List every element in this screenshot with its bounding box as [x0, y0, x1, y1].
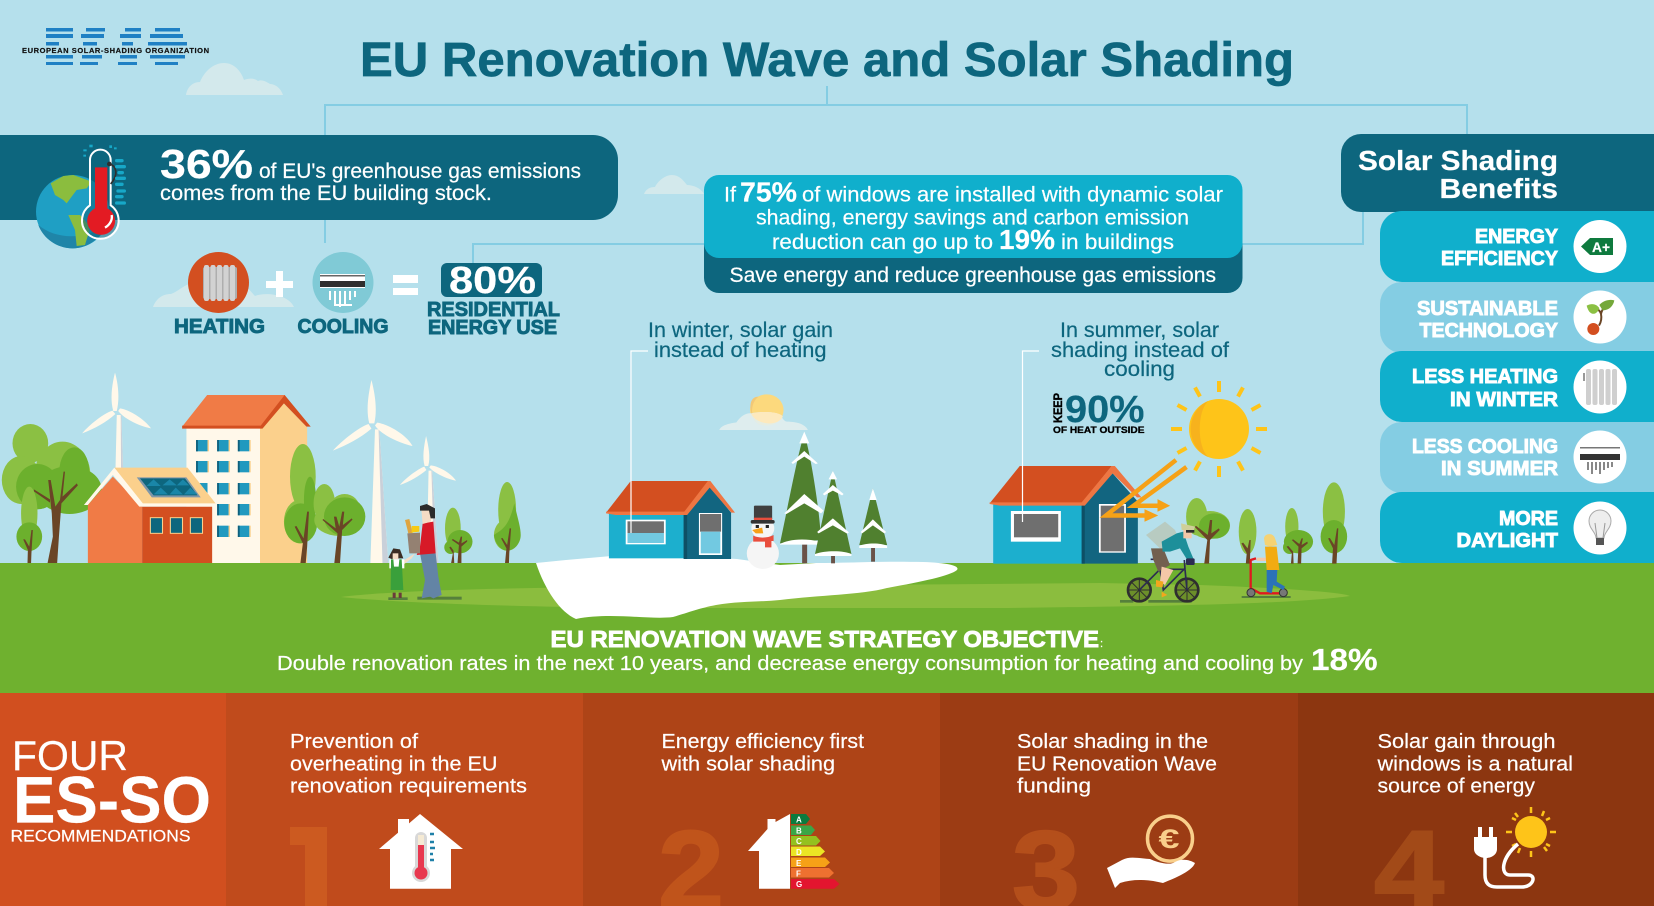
captions: summer [1051, 319, 1229, 381]
icon: cyclist [1146, 522, 1195, 597]
people: man and girl [388, 504, 462, 600]
panel: four ES-SO recommendations: RECOMMENDATIONS [10, 826, 190, 846]
snow patch [536, 555, 958, 619]
benefit: energy efficiency: EFFICIENCY [1441, 248, 1559, 270]
benefit: sustainable technology: TECHNOLOGY [1420, 320, 1559, 342]
benefit: sustainable technology [1380, 282, 1654, 353]
benefit: energy efficiency: A+ [1592, 239, 1610, 255]
text: emissions line two: comes from the EU building stock. [160, 182, 492, 205]
icon: winter sun and cloud [719, 394, 808, 430]
heading box: Solar Shading [1358, 145, 1558, 176]
benefit: energy efficiency [1380, 211, 1654, 282]
label: residential energy use: RESIDENTIAL [427, 299, 560, 321]
cloud: center [644, 175, 704, 194]
icon: house with solar panels [84, 468, 216, 563]
captions: summer: cooling [1104, 358, 1175, 381]
callout: 75% windows: 19% [999, 224, 1055, 255]
callout: 75% windows: shading, energy savings and carbon emission [756, 206, 1189, 230]
panel: recommendation 1 [226, 693, 583, 906]
icon: house with energy label: G [796, 880, 802, 889]
captions: summer: In summer, solar [1060, 319, 1219, 342]
icon: pine trees [780, 432, 887, 563]
icon: trees by the tower [284, 444, 365, 563]
icon: right side trees [1186, 482, 1347, 564]
icon: house with energy label [748, 814, 840, 889]
stat: keep 90% of heat outside: OF HEAT OUTSIDE [1053, 425, 1144, 435]
benefit: more daylight: DAYLIGHT [1456, 530, 1558, 552]
benefit: energy efficiency: ENERGY [1475, 226, 1559, 248]
objective text: 18% [1311, 642, 1378, 677]
benefit: sustainable technology: SUSTAINABLE [1417, 298, 1558, 320]
label: residential energy use [427, 299, 560, 339]
panel: recommendation 2 [583, 693, 940, 906]
icon: globe and thermometer [36, 145, 126, 248]
icon: big left tree [2, 424, 102, 563]
captions: winter: instead of heating [654, 339, 826, 362]
benefit: less cooling in summer: LESS COOLING [1412, 436, 1558, 458]
scene: wind turbines, trees, houses on the left [2, 373, 521, 563]
icon: child [1257, 534, 1285, 593]
benefit: less heating in winter: LESS HEATING [1412, 366, 1558, 388]
icon: plug and sun [1474, 807, 1556, 887]
icon: hand holding euro coin: € [1158, 824, 1180, 854]
scene: winter house [606, 394, 887, 569]
label: residential energy use: ENERGY USE [428, 317, 557, 339]
callout: 75% windows: reduction can go up to [772, 231, 993, 254]
icon: plus [266, 271, 293, 297]
ground path highlight [341, 583, 1350, 608]
callout: 75% windows: Save energy and reduce greenhouse gas emissions [730, 264, 1216, 287]
text: emissions line one: of EU's greenhouse gas emissions [259, 160, 581, 183]
icon: turbine one [82, 373, 151, 475]
icon: house with energy label: C [796, 837, 802, 846]
lead line: winter [631, 351, 648, 533]
callout: 75% windows: of windows are installed with dynamic solar [802, 184, 1223, 206]
logo: ES-SO: EUROPEAN SOLAR-SHADING ORGANIZATION [22, 46, 209, 55]
icon: snowman [747, 506, 779, 569]
benefit: less cooling in summer: IN SUMMER [1441, 458, 1559, 480]
equation: heating plus cooling equals 80% [153, 252, 560, 339]
objective text [277, 626, 1378, 677]
benefit: more daylight: MORE [1499, 508, 1558, 530]
panel: recommendation 4 [1298, 693, 1654, 906]
panel: four ES-SO recommendations [0, 693, 226, 906]
panel: recommendation 4: source of energy [1378, 774, 1536, 798]
scene: summer house, sun, people [990, 466, 1347, 564]
objective text: Double renovation rates in the next 10 years, and decrease energy consumption for heating and cooling by [277, 652, 1304, 675]
stat: keep 90% of heat outside: 90% [1065, 389, 1144, 431]
icon: house with energy label: E [796, 859, 802, 868]
connector lines [325, 86, 1467, 263]
captions: winter [648, 319, 833, 362]
heading box: Benefits [1440, 173, 1558, 204]
callout: 75% windows: in buildings [1061, 231, 1174, 254]
objective text: EU RENOVATION WAVE STRATEGY OBJECTIVE [550, 626, 1099, 652]
panel: recommendation 4: Solar gain through [1378, 730, 1556, 753]
cloud: top left [186, 63, 283, 95]
benefit: less cooling in summer [1380, 422, 1654, 493]
heading box [1341, 134, 1654, 212]
panel: recommendation 1: renovation requirements [290, 774, 527, 798]
icon: scooter [1247, 558, 1287, 597]
icon: house with energy label: B [796, 826, 802, 836]
captions: winter: In winter, solar gain [648, 319, 833, 342]
cloud behind icons [153, 284, 294, 307]
icon: summer house [990, 466, 1141, 564]
objective text: : [1100, 638, 1103, 650]
benefit: less heating in winter [1380, 351, 1654, 422]
icon: house with thermometer [379, 814, 463, 889]
icon: house with energy label: F [796, 870, 801, 878]
icon: bicycle [1128, 559, 1198, 601]
captions: summer: shading instead of [1051, 339, 1229, 362]
icon: turbine three [400, 436, 456, 563]
lead line: summer [1022, 351, 1039, 522]
stat: keep 90% of heat outside: KEEP [1051, 393, 1065, 423]
panel: four ES-SO recommendations: FOUR [12, 732, 128, 779]
benefit: more daylight [1380, 492, 1654, 563]
panel: recommendation 2: Energy efficiency first [662, 730, 864, 753]
icon: house with energy label: A [796, 816, 802, 824]
callout: 75% windows: 75% [740, 176, 797, 208]
ground [0, 563, 1654, 693]
icon: turbine two [333, 380, 412, 563]
icon: trees beyond the turbines [444, 482, 521, 563]
icon: summer sun [1171, 381, 1267, 477]
icon: heating radiator [188, 252, 249, 313]
title: EU Renovation Wave and Solar Shading [360, 34, 1294, 87]
panel: recommendation 2: with solar shading [660, 752, 835, 776]
panel: solar shading benefits [1341, 134, 1654, 563]
icon: winter house [606, 481, 735, 559]
panel: 36% emissions band [0, 135, 618, 248]
panel: recommendation 4: windows is a natural [1376, 752, 1573, 776]
callout: 75% windows [704, 175, 1242, 293]
label: cooling: COOLING [298, 316, 388, 338]
icon: apartment tower [182, 395, 311, 563]
panel: recommendation 1: Prevention of [290, 730, 418, 753]
benefit: less heating in winter: IN WINTER [1450, 389, 1559, 411]
arrows: sun rays into house [1106, 460, 1186, 521]
label: heating: HEATING [174, 316, 265, 338]
logo: ES-SO [22, 28, 209, 65]
stat: 80%: 80% [449, 260, 536, 302]
panel: recommendation 3 [940, 693, 1298, 906]
stat: 36%: 36% [160, 141, 253, 187]
panel: recommendation 3: EU Renovation Wave [1017, 752, 1217, 776]
panel: recommendation 1: overheating in the EU [290, 752, 498, 776]
icon: cooling air conditioner [312, 252, 374, 313]
panel: recommendation 3: Solar shading in the [1017, 730, 1208, 753]
icon: house with energy label: D [796, 848, 802, 857]
icon: equals [393, 275, 418, 295]
people: cyclist and child on scooter [1120, 522, 1291, 603]
icon: hand holding euro coin [1107, 816, 1195, 888]
callout: 75% windows: If [724, 184, 736, 206]
panel: recommendation 3: funding [1017, 774, 1091, 798]
panel: four ES-SO recommendations: ES-SO [13, 762, 211, 836]
